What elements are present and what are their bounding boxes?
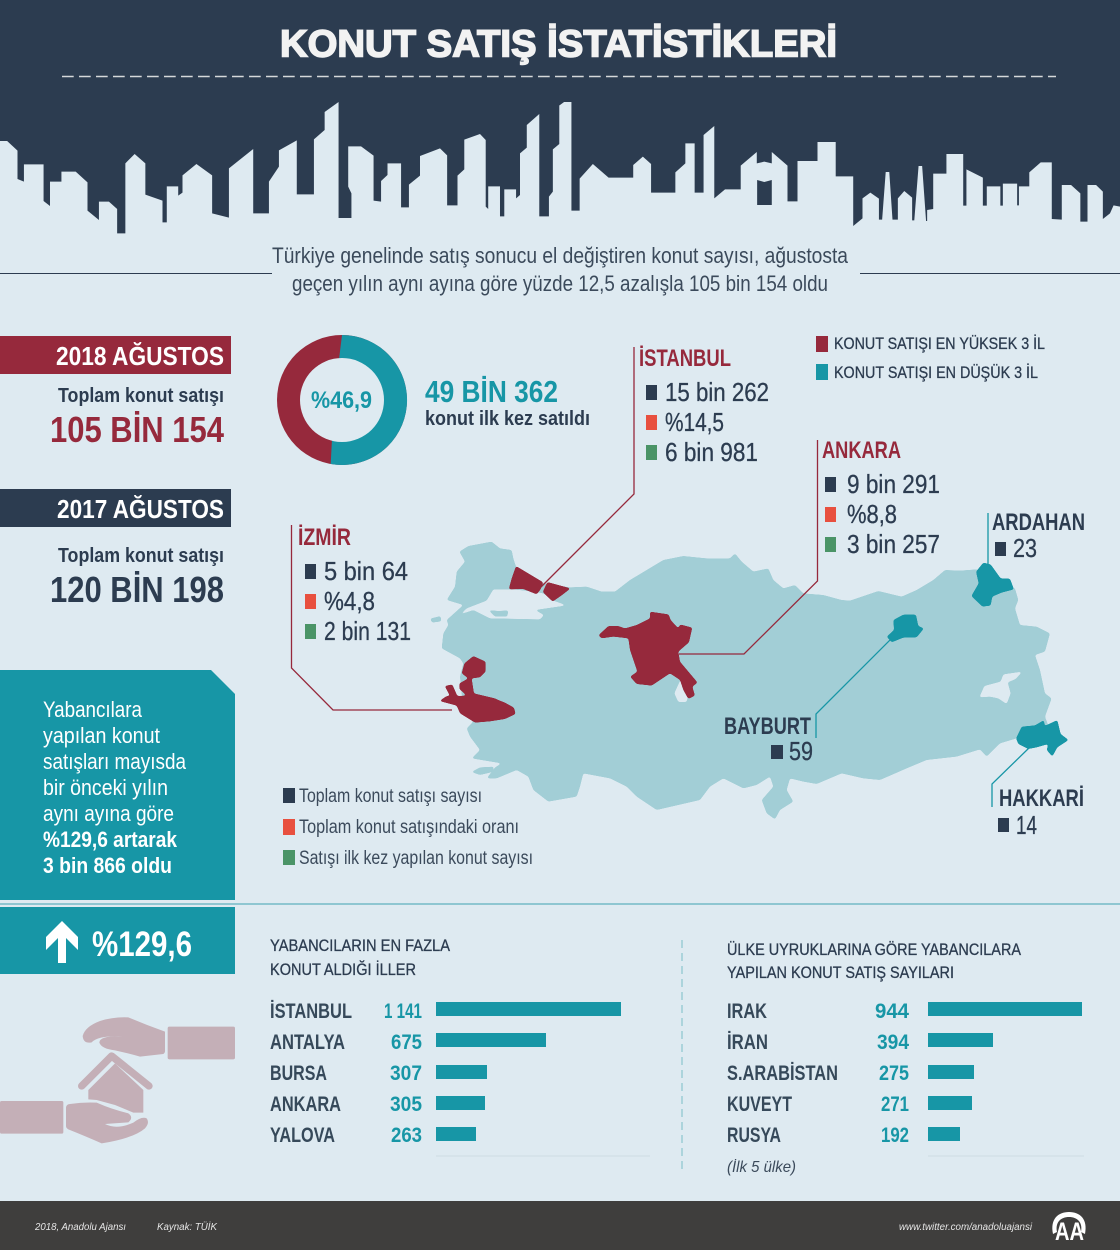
callout: Ankara: 3 bin 257: [847, 529, 940, 559]
map: island west: [430, 616, 441, 623]
chart: sales by nationality: 192: [881, 1124, 909, 1147]
legend: map indicators: Satışı ilk kez yapılan konut sayısı: [299, 848, 533, 869]
skyline left half: [0, 77, 559, 233]
province: Ankara: [598, 612, 698, 699]
panel: 2018 august: 2018 AĞUSTOS: [56, 341, 224, 371]
connector: Ankara: [679, 440, 818, 654]
chart: provinces bought by foreigners: BURSA: [270, 1062, 327, 1085]
map: salt lake: [674, 679, 688, 702]
chart: provinces bought by foreigners: 305: [390, 1093, 422, 1116]
province: Istanbul: [509, 566, 571, 602]
callout: Hakkari: HAKKARİ: [999, 785, 1084, 812]
panel: foreign sales: bir önceki yılın: [43, 775, 168, 800]
chart: provinces bought by foreigners: 675: [391, 1031, 422, 1054]
chart: provinces bought by foreigners: 307: [390, 1062, 422, 1085]
callout: Ardahan: 23: [1013, 533, 1037, 563]
footer: www.twitter.com/anadoluajansi: [899, 1222, 1033, 1233]
footer: 2018, Anadolu Ajansı: [34, 1222, 126, 1233]
callout: Istanbul: İSTANBUL: [639, 345, 731, 372]
chart: sales by nationality: 944: [875, 1000, 909, 1023]
panel: 2018 august: 105 BİN 154: [50, 409, 224, 450]
callout: Ankara: 9 bin 291: [847, 469, 940, 499]
callout: Ankara: [822, 437, 940, 559]
callout: Izmir: İZMİR: [298, 524, 351, 551]
callout: Ardahan: ARDAHAN: [992, 509, 1085, 536]
intro text: [272, 243, 849, 296]
legend: map indicators: Toplam konut satışındaki oranı: [299, 817, 519, 838]
chart: sales by nationality: İRAN: [727, 1031, 768, 1054]
panel: 2018 august: [0, 336, 231, 450]
chart: provinces bought by foreigners: 1 141: [384, 1000, 422, 1023]
donut chart: %46,9: [311, 387, 372, 414]
map: lake Van: [979, 672, 1022, 704]
skyline window: [757, 180, 772, 205]
footer: [0, 1201, 1120, 1250]
panel: 2017 august: 2017 AĞUSTOS: [57, 494, 224, 524]
callout: Ankara: ANKARA: [822, 437, 901, 464]
panel: increase badge: %129,6: [92, 925, 192, 964]
chart: provinces bought by foreigners: YABANCILARIN EN FAZLA: [270, 936, 451, 955]
callout: Bayburt: BAYBURT: [724, 713, 811, 740]
panel: 2017 august: Toplam konut satışı: [58, 545, 224, 567]
skyline right half: [558, 77, 1120, 226]
chart: sales by nationality: (İlk 5 ülke): [727, 1157, 796, 1176]
callout: Istanbul: %14,5: [665, 407, 724, 437]
chart: sales by nationality: 394: [877, 1031, 909, 1054]
map: island: [488, 610, 508, 617]
panel: foreign sales: 3 bin 866 oldu: [43, 853, 172, 878]
chart: sales by nationality: 275: [879, 1062, 909, 1085]
callout: Izmir: [298, 524, 411, 646]
callout: Istanbul: [639, 345, 769, 467]
legend: top provinces: [816, 334, 1045, 382]
connector: Bayburt: [816, 639, 891, 738]
map: island Aegean: [471, 767, 494, 775]
map: Marmara sea: [447, 589, 567, 627]
callout: Izmir: 5 bin 64: [324, 556, 408, 586]
chart: provinces bought by foreigners: YALOVA: [270, 1124, 335, 1147]
header with skyline: [0, 0, 1120, 233]
chart: sales by nationality: [727, 940, 1084, 1176]
callout: Istanbul: 6 bin 981: [665, 437, 758, 467]
panel: foreign sales: aynı ayına göre: [43, 801, 174, 826]
callout: Izmir: 2 bin 131: [324, 616, 411, 646]
first-time sales callout: [425, 374, 590, 430]
callout: Ardahan: [992, 509, 1085, 563]
panel: foreign sales: [0, 670, 235, 900]
callout: Ankara: %8,8: [847, 499, 897, 529]
chart: provinces bought by foreigners: 263: [391, 1124, 422, 1147]
chart: provinces bought by foreigners: İSTANBUL: [270, 1000, 352, 1023]
chart: sales by nationality: RUSYA: [727, 1124, 781, 1147]
callout: Bayburt: 59: [789, 736, 813, 766]
donut chart: [277, 335, 407, 465]
connector: Ardahan: [987, 513, 989, 565]
title: KONUT SATIŞ İSTATİSTİKLERİ: [280, 24, 837, 66]
connector: Hakkari: [992, 747, 1030, 807]
panel: foreign sales: yapılan konut: [43, 723, 160, 748]
icon: up arrow: [46, 921, 78, 963]
callout: Bayburt: [724, 713, 813, 766]
legend: map indicators: [283, 786, 533, 869]
chart: provinces bought by foreigners: ANTALYA: [270, 1031, 345, 1054]
chart: sales by nationality: YAPILAN KONUT SATIŞ SAYILARI: [727, 963, 954, 982]
province: Bayburt: [887, 615, 924, 642]
callout: Hakkari: [998, 785, 1084, 840]
chart: sales by nationality: 271: [881, 1093, 909, 1116]
icon: AA logo: [1052, 1212, 1086, 1246]
first-time sales callout: konut ilk kez satıldı: [425, 408, 590, 430]
callout: Hakkari: 14: [1016, 810, 1037, 840]
chart: sales by nationality: S.ARABİSTAN: [727, 1062, 838, 1085]
intro text: Türkiye genelinde satış sonucu el değiştiren konut sayısı, ağustosta: [272, 243, 849, 268]
panel: foreign sales: Yabancılara: [43, 697, 143, 722]
footer: Kaynak: TÜİK: [157, 1221, 218, 1233]
province: Ardahan: [971, 563, 1014, 607]
map: Thrace and Anatolia: [442, 542, 1052, 819]
panel: increase badge: [0, 907, 235, 974]
callout: Izmir: %4,8: [324, 586, 375, 616]
legend: map indicators: Toplam konut satışı sayısı: [299, 786, 482, 807]
province: Hakkari: [1016, 720, 1069, 757]
intro text: geçen yılın aynı ayına göre yüzde 12,5 azalışla 105 bin 154 oldu: [292, 271, 828, 296]
first-time sales callout: 49 BİN 362: [425, 374, 558, 409]
icon: hands and house: [0, 1017, 235, 1143]
panel: 2017 august: [0, 489, 231, 610]
chart: sales by nationality: KUVEYT: [727, 1093, 792, 1116]
province: Izmir: [439, 656, 516, 723]
connector: Izmir: [292, 525, 452, 710]
legend: top provinces: KONUT SATIŞI EN YÜKSEK 3 İL: [834, 334, 1045, 353]
chart: sales by nationality: ÜLKE UYRUKLARINA GÖRE YABANCILARA: [727, 940, 1022, 959]
chart: provinces bought by foreigners: [270, 936, 650, 1156]
panel: 2018 august: Toplam konut satışı: [58, 385, 224, 407]
connector: Istanbul: [541, 347, 634, 587]
legend: top provinces: KONUT SATIŞI EN DÜŞÜK 3 İL: [834, 363, 1038, 382]
chart: provinces bought by foreigners: KONUT ALDIĞI İLLER: [270, 960, 416, 979]
callout: Istanbul: 15 bin 262: [665, 377, 769, 407]
panel: 2017 august: 120 BİN 198: [50, 569, 224, 610]
chart: sales by nationality: IRAK: [727, 1000, 767, 1023]
icon: AA logo: AA: [1055, 1218, 1084, 1246]
panel: foreign sales: satışları mayısda: [43, 749, 187, 774]
chart: provinces bought by foreigners: ANKARA: [270, 1093, 341, 1116]
panel: foreign sales: %129,6 artarak: [43, 827, 178, 852]
map of Turkey: [430, 542, 1069, 819]
